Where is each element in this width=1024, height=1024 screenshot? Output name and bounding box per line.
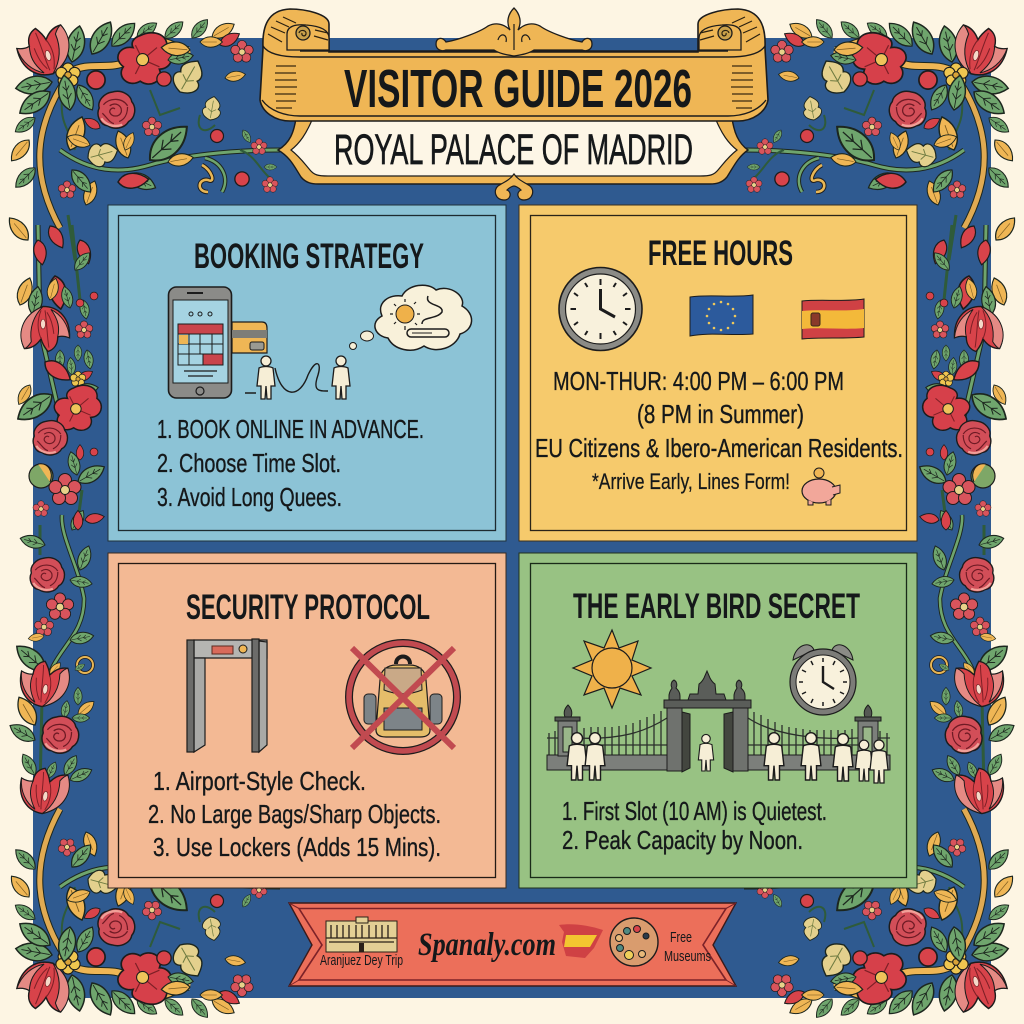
label: Aranjuez day trip: Aranjuez Dey Trip bbox=[320, 952, 403, 969]
list: early bird tips bbox=[562, 796, 827, 855]
icon: palace gate with iron fence bbox=[547, 671, 890, 783]
logo: spanaly.com: Spanaly.com bbox=[418, 927, 556, 963]
label: free museums: Museums bbox=[664, 948, 711, 965]
icon: Spain map bbox=[559, 924, 603, 958]
icon: thought bubble with sun and book bbox=[350, 285, 472, 350]
text: free hours details bbox=[535, 366, 903, 494]
text: free hours details: *Arrive Early, Lines Form! bbox=[592, 469, 790, 494]
list: security steps bbox=[148, 766, 441, 862]
text: free hours details: EU Citizens & Ibero-American Residents. bbox=[535, 433, 903, 463]
icon: wall clock bbox=[559, 268, 642, 350]
icon: phone with calendar bbox=[168, 287, 232, 398]
icon: two people joined by winding queue line bbox=[245, 356, 350, 399]
scroll curl: left bbox=[268, 17, 329, 50]
heading: free hours: FREE HOURS bbox=[648, 234, 793, 273]
subtitle: royal palace of madrid: ROYAL PALACE OF MADRID bbox=[334, 126, 693, 174]
heading: the early bird secret: THE EARLY BIRD SECRET bbox=[573, 587, 860, 626]
footer ribbon bbox=[289, 903, 736, 986]
floral corner: top-right bbox=[744, 16, 1017, 228]
icon: piggy bank with coin bbox=[802, 468, 840, 505]
list: security steps: 3. Use Lockers (Adds 15 Mins). bbox=[153, 832, 441, 862]
icon: credit card bbox=[232, 322, 267, 353]
list: booking steps bbox=[157, 414, 424, 512]
text: free hours details: MON-THUR: 4:00 PM – 6:00 PM bbox=[553, 366, 844, 396]
floral corner: top-left bbox=[7, 16, 280, 228]
panel: booking strategy bbox=[108, 205, 506, 541]
icon: metal detector gate bbox=[187, 639, 267, 752]
panel: the early bird secret bbox=[519, 553, 917, 888]
label: free museums: Free bbox=[670, 929, 692, 946]
list: booking steps: 1. BOOK ONLINE IN ADVANCE. bbox=[157, 414, 424, 444]
text: free hours details: (8 PM in Summer) bbox=[637, 399, 804, 429]
list: early bird tips: 2. Peak Capacity by Noon. bbox=[562, 825, 803, 855]
list: security steps: 1. Airport-Style Check. bbox=[153, 766, 366, 796]
list: booking steps: 2. Choose Time Slot. bbox=[157, 448, 341, 478]
icon: Spain flag bbox=[802, 299, 864, 339]
heading: security protocol: SECURITY PROTOCOL bbox=[186, 588, 430, 627]
icon: prohibited backpack bbox=[349, 643, 457, 751]
heading: booking strategy: BOOKING STRATEGY bbox=[194, 237, 424, 276]
floral vine: left side bbox=[4, 214, 108, 817]
icon: EU flag bbox=[690, 295, 753, 336]
list: booking steps: 3. Avoid Long Quees. bbox=[157, 482, 342, 512]
floral corner: bottom-right bbox=[744, 809, 1017, 1021]
label: free museums bbox=[664, 929, 711, 965]
ornament: bottom scroll bbox=[495, 174, 533, 200]
title scroll banner bbox=[260, 8, 768, 121]
panel: security protocol bbox=[108, 553, 506, 888]
floral corner: bottom-left bbox=[7, 809, 280, 1021]
icon: sun bbox=[573, 630, 651, 708]
scroll curl: right bbox=[699, 17, 760, 50]
ornament: top crest bbox=[436, 8, 592, 56]
title: visitor guide 2026: VISITOR GUIDE 2026 bbox=[344, 59, 692, 119]
subtitle plaque bbox=[278, 118, 748, 200]
icon: alarm clock bbox=[790, 645, 856, 715]
icon: art palette bbox=[610, 918, 658, 966]
floral vine: right side bbox=[916, 214, 1020, 817]
panel: free hours bbox=[519, 205, 917, 541]
icon: Aranjuez palace bbox=[326, 917, 397, 952]
list: early bird tips: 1. First Slot (10 AM) is Quietest. bbox=[562, 796, 827, 826]
list: security steps: 2. No Large Bags/Sharp Objects. bbox=[148, 799, 441, 829]
